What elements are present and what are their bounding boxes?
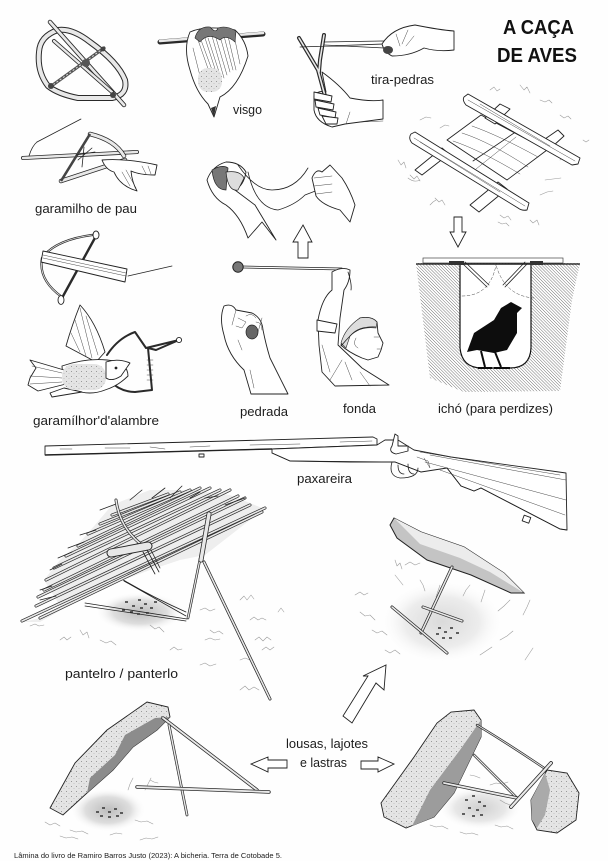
label: lousas, lajotes e lastras (286, 736, 368, 770)
footer: source credit: Lâmina do livro de Ramiro Barros Justo (2023): A bicheria. Terra de Cotobade 5. (14, 851, 282, 860)
label: fonda: fonda (343, 401, 377, 416)
trap: bird on wire snare, garamílhor'd'alambre (28, 305, 182, 397)
label: lousas, lajotes e lastras: e lastras (300, 755, 347, 770)
arrow: down (450, 217, 466, 247)
trap: pantelro deadfall made of sticks (22, 486, 284, 699)
label: garamílhor'd'alambre: garamílhor'd'alambre (33, 413, 159, 428)
weapon: fonda whirled by a man (233, 262, 389, 386)
label: visgo: visgo (233, 102, 262, 117)
label: lousas, lajotes e lastras: lousas, lajotes (286, 736, 368, 751)
label: tira-pedras: tira-pedras (371, 72, 435, 87)
trap: slab deadfall, upper right (355, 518, 533, 664)
title (497, 16, 577, 67)
weapon: fonda pouch held between two hands (207, 162, 355, 240)
weapon: paxareira shotgun (45, 434, 567, 530)
trap: leaning stone with sticks, lower left (45, 702, 269, 840)
arrow: diagonal up-right (343, 665, 386, 723)
weapon: tira-pedras slingshot with hands (299, 25, 454, 127)
trap: ichó top view, boards between logs (398, 85, 589, 226)
trap: two stones with sticks, lower right (381, 710, 579, 835)
arrow: left (251, 757, 287, 772)
label: pedrada: pedrada (240, 404, 289, 419)
trap: wooden hoop snare (39, 22, 125, 105)
arrow: right (361, 757, 394, 772)
icon: partridge silhouette (467, 302, 522, 368)
label: pantelro / panterlo: pantelro / panterlo (65, 666, 178, 681)
diagram: ichó pit with partridge (416, 258, 580, 392)
trap: crossbow-like wire snare (41, 231, 172, 304)
title: DE AVES (497, 44, 577, 67)
trap: garamilho de pau (23, 119, 157, 191)
label: garamilho de pau: garamilho de pau (35, 201, 137, 216)
label: ichó (para perdizes): ichó (para perdizes) (438, 401, 553, 416)
arrow: up (293, 225, 312, 258)
label: paxareira: paxareira (297, 471, 353, 486)
trap: visgo, bird stuck on branch (160, 27, 263, 117)
title: A CAÇA (503, 16, 574, 39)
weapon: pedrada, hand with stone (222, 305, 288, 394)
